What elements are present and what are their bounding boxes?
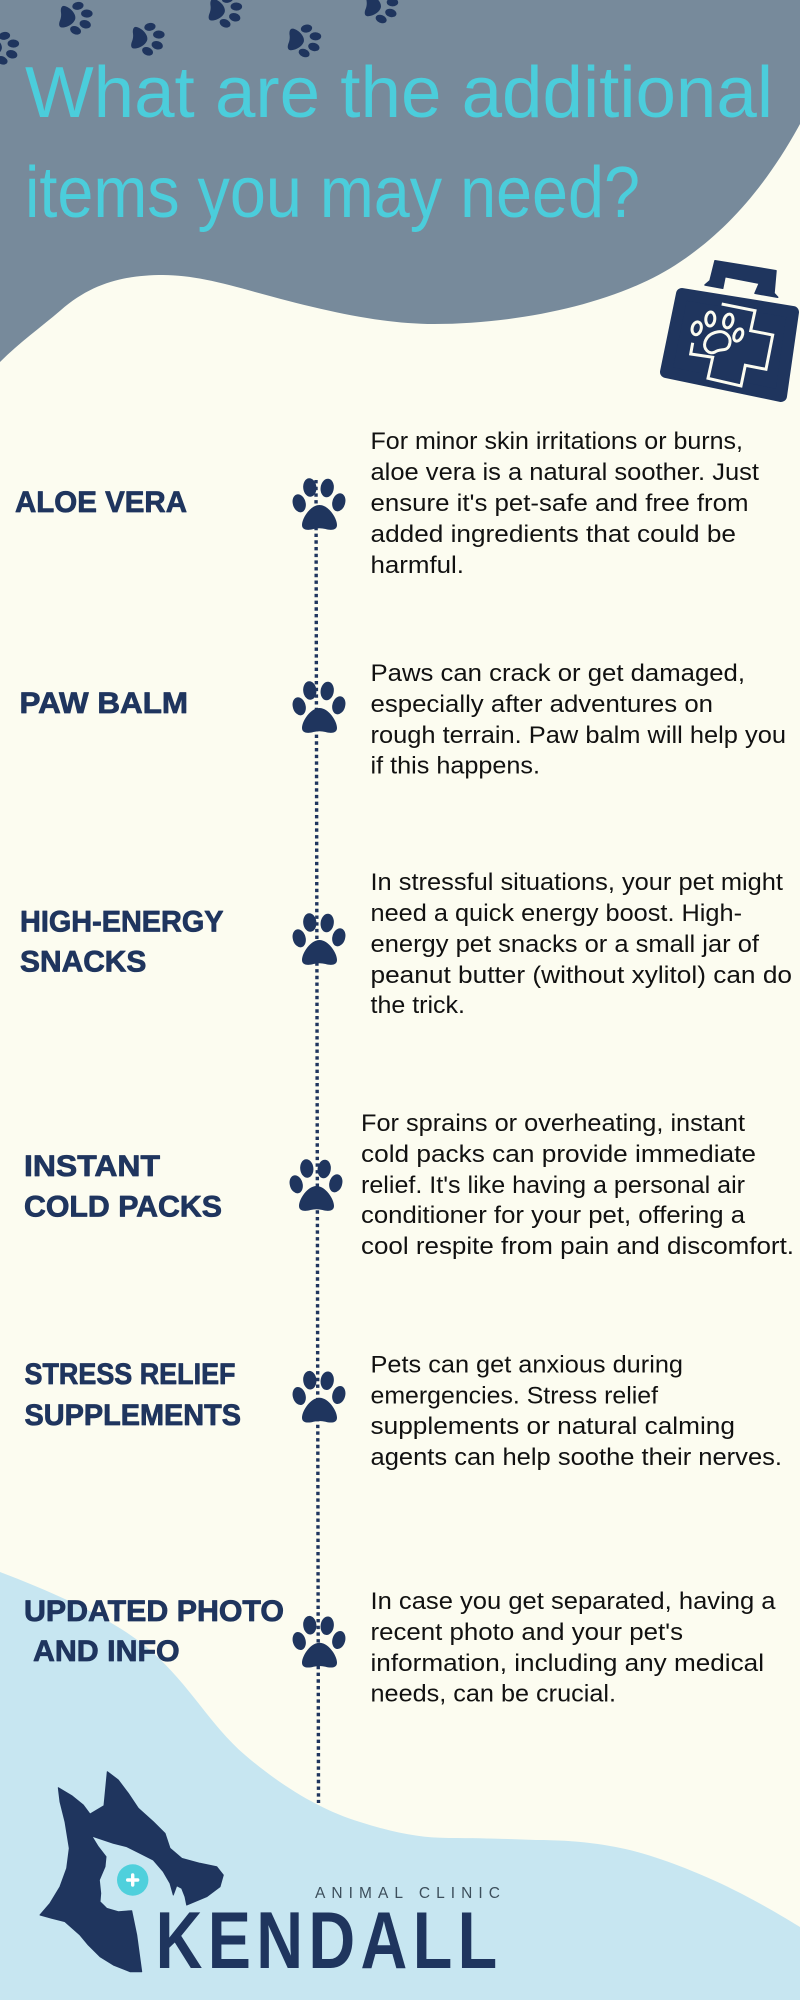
text: high-energy snacks: the trick. [370, 992, 465, 1019]
heading: updated photo and info [24, 1595, 284, 1668]
text: paw balm: if this happens. [370, 752, 540, 780]
text: high-energy snacks: In stressful situations, your pet might [370, 869, 783, 896]
row: paw balm [20, 660, 786, 780]
text: aloe vera: harmful. [370, 552, 464, 579]
heading: aloe vera: ALOE VERA [15, 486, 187, 519]
text: aloe vera: added ingredients that could be [370, 521, 736, 548]
text: instant cold packs: cold packs can provide immediate [361, 1141, 756, 1168]
logo wordmark: KENDALL [156, 1895, 497, 1986]
row: aloe vera [15, 428, 759, 579]
title [25, 53, 773, 233]
text: stress relief supplements: emergencies. Stress relief [370, 1382, 658, 1410]
text: instant cold packs: relief. It's like having a personal air [361, 1172, 745, 1199]
text: high-energy snacks [370, 869, 792, 1019]
heading: updated photo and info: AND INFO [33, 1635, 180, 1668]
icon: first aid kit with paw [666, 261, 793, 396]
text: updated photo and info: information, including any medical [370, 1650, 764, 1677]
text: paw balm: rough terrain. Paw balm will help you [370, 722, 786, 749]
text: paw balm [370, 660, 786, 780]
header wave background [0, 0, 800, 362]
text: stress relief supplements [370, 1352, 782, 1471]
heading: stress relief supplements: STRESS RELIEF [24, 1358, 236, 1391]
heading: instant cold packs [24, 1150, 222, 1224]
text: updated photo and info: needs, can be crucial. [370, 1681, 616, 1708]
heading: stress relief supplements: SUPPLEMENTS [24, 1399, 241, 1432]
heading: stress relief supplements [24, 1358, 241, 1432]
text: instant cold packs [361, 1110, 794, 1260]
icon: eye with cross [117, 1864, 148, 1896]
text: aloe vera [370, 428, 759, 579]
icon: paw [288, 1159, 344, 1211]
heading: instant cold packs: COLD PACKS [24, 1191, 222, 1224]
row: updated photo and info [24, 1588, 776, 1708]
text: high-energy snacks: energy pet snacks or a small jar of [370, 931, 759, 958]
heading: high-energy snacks: SNACKS [20, 946, 146, 979]
icon: paw [291, 478, 347, 530]
dotted timeline [316, 480, 318, 1803]
icon: paw [291, 1615, 347, 1668]
heading: updated photo and info: UPDATED PHOTO [24, 1595, 284, 1628]
row: instant cold packs [24, 1110, 794, 1260]
text: updated photo and info: In case you get separated, having a [370, 1588, 776, 1615]
footer wave background [0, 1572, 800, 2000]
text: stress relief supplements: agents can help soothe their nerves. [370, 1444, 782, 1471]
heading: paw balm: PAW BALM [20, 687, 188, 720]
text: aloe vera: ensure it's pet-safe and free from [370, 490, 748, 517]
row: stress relief supplements [24, 1352, 782, 1471]
text: aloe vera: For minor skin irritations or burns, [370, 428, 743, 455]
text: stress relief supplements: supplements or natural calming [370, 1413, 735, 1440]
text: updated photo and info [370, 1588, 776, 1708]
title: What are the additional [25, 53, 773, 133]
logo subtitle: ANIMAL CLINIC [315, 1885, 500, 1902]
icon: paw [291, 913, 347, 965]
text: instant cold packs: For sprains or overheating, instant [361, 1110, 745, 1137]
icon: paw [291, 681, 347, 733]
row: high-energy snacks [20, 869, 792, 1019]
text: stress relief supplements: Pets can get anxious during [370, 1352, 683, 1378]
decorative paw prints [0, 0, 400, 68]
heading: instant cold packs: INSTANT [24, 1150, 160, 1183]
title: items you may need? [25, 153, 640, 233]
text: paw balm: Paws can crack or get damaged, [370, 660, 745, 687]
text: aloe vera: aloe vera is a natural soother. Just [370, 459, 759, 486]
text: paw balm: especially after adventures on [370, 691, 713, 718]
text: high-energy snacks: need a quick energy boost. High- [370, 900, 742, 927]
heading: high-energy snacks [20, 906, 224, 979]
text: instant cold packs: cool respite from pain and discomfort. [361, 1233, 794, 1260]
icon: dog silhouette [40, 1772, 223, 1972]
text: high-energy snacks: peanut butter (without xylitol) can do [370, 962, 792, 989]
logo: Kendall Animal Clinic [40, 1772, 500, 1986]
text: instant cold packs: conditioner for your pet, offering a [361, 1202, 746, 1229]
heading: high-energy snacks: HIGH-ENERGY [20, 906, 224, 939]
text: updated photo and info: recent photo and your pet's [370, 1619, 683, 1646]
icon: paw [291, 1370, 347, 1423]
